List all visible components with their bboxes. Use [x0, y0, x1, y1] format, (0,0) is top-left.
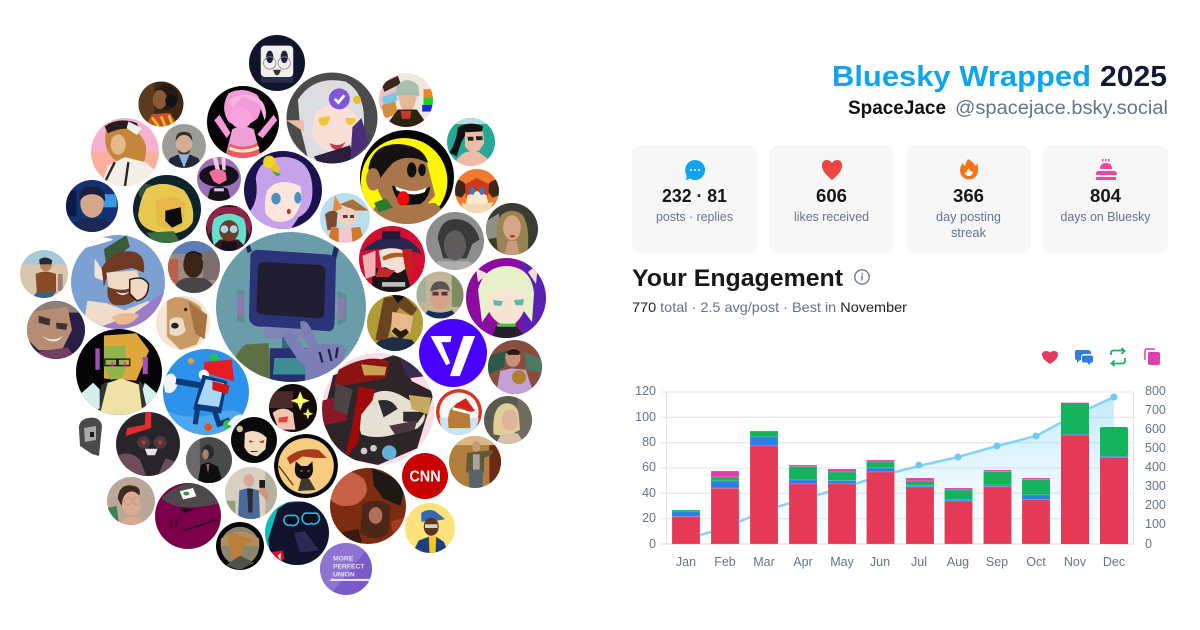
stat label — [936, 209, 1001, 240]
chart: monthly engagement stacked bars with cumulative line — [635, 384, 1166, 569]
avatar: soldier with pride flag — [379, 73, 433, 127]
month labels: Sep — [986, 555, 1008, 569]
bar: Nov — [1061, 403, 1089, 544]
user name and handle: SpaceJace — [848, 98, 946, 119]
avatar: purple face with hat — [155, 483, 221, 549]
avatar: orange fox — [455, 169, 499, 213]
stat value: 366 — [953, 186, 984, 206]
bar: Jan — [672, 510, 700, 544]
avatar: curly hair woman — [91, 118, 159, 186]
stat value: 606 — [816, 186, 847, 206]
month labels: Feb — [714, 555, 736, 569]
avatar: festive blue robot — [163, 349, 249, 435]
left axis labels: 100 — [635, 410, 656, 424]
left axis labels: 60 — [642, 460, 656, 474]
stacked bars — [672, 431, 1050, 544]
month labels: Mar — [753, 555, 775, 569]
avatar: cowboy fox — [320, 193, 370, 243]
right axis labels: 100 — [1145, 517, 1166, 531]
bar: Jul — [906, 478, 934, 544]
bar: May — [828, 469, 856, 544]
avatar: More Perfect Union logo: UNION — [333, 571, 355, 578]
right axis labels: 500 — [1145, 441, 1166, 455]
avatar: CNN logo — [402, 453, 448, 499]
engagement summary: 770 total · 2.5 avg/post · Best in November — [632, 299, 907, 315]
left axis labels: 80 — [642, 435, 656, 449]
month labels: Dec — [1103, 555, 1125, 569]
avatar: dog with black ring — [216, 522, 264, 570]
left axis labels — [635, 384, 656, 551]
avatar: man in blue light — [66, 180, 118, 232]
stat value: 232 · 81 — [662, 186, 727, 206]
avatar: dark-haired person — [186, 437, 232, 483]
avatar: golden dog — [156, 296, 210, 350]
right axis labels: 200 — [1145, 498, 1166, 512]
panel: days on Bluesky — [1043, 145, 1168, 253]
month labels: May — [830, 555, 855, 569]
avatar: sparkle character — [269, 384, 317, 432]
avatar: red hat cat — [359, 226, 425, 292]
icon: birthday cake — [1096, 159, 1117, 180]
avatar: pink bunny on purple — [197, 157, 241, 201]
avatar: lilac hair girl — [244, 151, 322, 229]
stat label: days on Bluesky — [1060, 209, 1151, 224]
panel: posting streak — [906, 145, 1031, 253]
avatar: yellow hair portrait — [133, 175, 201, 243]
bar: Jun — [866, 460, 894, 544]
avatar: greyscale woman — [426, 212, 484, 270]
avatar: long-haired man with sunglasses — [447, 118, 495, 166]
month labels — [676, 555, 1125, 569]
avatar: More Perfect Union logo: MORE — [333, 556, 354, 563]
month labels: Jun — [870, 555, 890, 569]
avatar: blurry close-up face — [330, 468, 406, 544]
right axis labels: 300 — [1145, 479, 1166, 493]
avatar: teal hair girl — [206, 205, 252, 251]
bar: Apr — [789, 465, 817, 544]
avatar: bald man with glasses — [162, 124, 206, 168]
avatar: green-skinned character — [76, 329, 162, 415]
avatar: cartoon bearded man — [367, 295, 423, 351]
avatar: cartoon boy on yellow — [360, 130, 454, 224]
avatar: man taking mirror selfie — [225, 467, 277, 519]
avatar: horned punk character — [322, 353, 434, 465]
avatar: More Perfect Union logo — [320, 543, 372, 595]
stat label: streak — [951, 225, 986, 240]
avatar: capybara with santa hat — [436, 389, 482, 437]
icon: like — [1042, 351, 1058, 364]
right axis labels: 800 — [1145, 384, 1166, 398]
avatar: The Verge logo — [419, 319, 487, 387]
user name and handle — [848, 98, 1168, 119]
avatar: silver hair elf — [286, 72, 378, 164]
panel: likes received — [769, 145, 894, 253]
avatar: man in blue cap on yellow — [405, 503, 455, 553]
icon: speech bubble — [685, 160, 705, 180]
bar: Mar — [750, 431, 778, 544]
icon: faint sketch avatar — [79, 418, 102, 456]
left axis labels: 120 — [635, 384, 656, 398]
right axis labels: 700 — [1145, 403, 1166, 417]
icon: flame — [960, 159, 978, 180]
icon: reply — [1075, 350, 1093, 365]
right axis labels: 400 — [1145, 460, 1166, 474]
avatar: monitor-head character, largest bubble — [216, 232, 366, 382]
avatar: CNN logo: CNN — [409, 469, 441, 486]
bar: Feb — [711, 471, 739, 544]
avatar: vampire girl — [231, 417, 277, 463]
avatar: smiling man with glasses — [27, 301, 85, 359]
month labels: Jul — [911, 555, 927, 569]
month labels: Aug — [947, 555, 969, 569]
avatar: smiling man — [416, 272, 464, 318]
panel: posts and replies — [632, 145, 757, 253]
avatar: woman with headset — [138, 82, 184, 126]
avatar: pink creature — [207, 86, 279, 158]
avatar: woman with long hair — [486, 203, 538, 255]
left axis labels: 40 — [642, 486, 656, 500]
right axis labels: 0 — [1145, 537, 1152, 551]
right axis labels: 600 — [1145, 422, 1166, 436]
bar: Oct — [1022, 478, 1050, 544]
cumulative area — [686, 397, 1114, 544]
avatar: man in olive jacket — [449, 436, 501, 488]
avatar: man eating coconut — [488, 340, 542, 394]
avatar: person on beach — [20, 250, 68, 298]
bar: Dec — [1100, 427, 1128, 544]
title: 2025 — [1100, 61, 1167, 93]
stat label: day posting — [936, 209, 1001, 224]
chart legend icons — [1042, 348, 1160, 366]
avatar: More Perfect Union logo: PERFECT — [333, 563, 365, 570]
heading: your engagement: Your Engagement — [632, 265, 843, 292]
icon: heart — [822, 160, 842, 180]
bar: Sep — [984, 470, 1012, 544]
left axis labels: 20 — [642, 511, 656, 525]
avatar: bearded cartoon man — [71, 235, 165, 329]
avatar: blonde woman — [484, 396, 532, 444]
avatar: woman with round glasses — [107, 477, 155, 525]
bar: Aug — [944, 488, 972, 544]
avatar: anime elf on purple — [466, 258, 546, 338]
avatar: man in hoodie — [168, 241, 220, 293]
right axis labels — [1145, 384, 1166, 551]
icon: quote — [1145, 349, 1160, 365]
user name and handle: @spacejace.bsky.social — [955, 98, 1168, 119]
stat value: 804 — [1090, 186, 1121, 206]
month labels: Oct — [1026, 555, 1046, 569]
avatar bubble cluster — [20, 35, 546, 595]
avatar: red-eyed hooded figure — [116, 412, 180, 476]
title: Bluesky Wrapped — [832, 61, 1091, 93]
left axis labels: 0 — [649, 537, 656, 551]
gridlines — [661, 392, 1134, 544]
cumulative line — [686, 394, 1118, 539]
icon: info — [855, 270, 869, 284]
avatar: vader with sunglasses — [265, 501, 329, 565]
month labels: Nov — [1064, 555, 1087, 569]
avatar: tv character — [249, 35, 305, 91]
icon: repost — [1111, 348, 1125, 366]
month labels: Apr — [793, 555, 813, 569]
avatar: autumn cat illustration — [274, 434, 338, 498]
stat label: likes received — [794, 209, 869, 224]
stat label: posts · replies — [656, 209, 733, 224]
month labels: Jan — [676, 555, 696, 569]
